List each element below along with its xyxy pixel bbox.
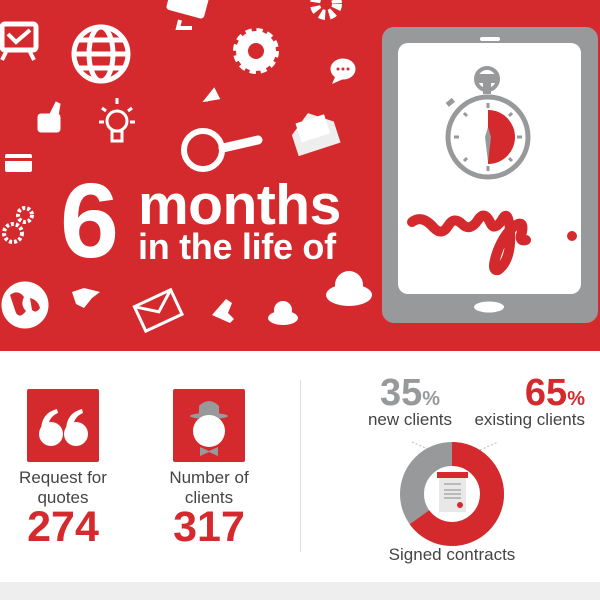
stat: request for quotes: [19, 389, 107, 551]
icon: world: [2, 282, 48, 328]
stat: number of clients: clients: [185, 488, 233, 507]
title: 6 months in the life of: months: [138, 173, 341, 237]
stat: request for quotes: quotes: [37, 488, 89, 507]
title: 6 months in the life of: in the life of: [138, 226, 336, 267]
label: 35% new clients: 35%: [380, 372, 440, 414]
icon: mail: [134, 290, 182, 331]
icon: globe: [74, 27, 128, 81]
icon: quote marks: [27, 389, 99, 462]
label: 35% new clients: [368, 372, 452, 429]
label: 65% existing clients: existing clients: [474, 410, 585, 429]
icons: decorative white icons: [0, 0, 372, 334]
icon: speech bubble: [331, 59, 355, 83]
icon: gears small: [4, 208, 32, 242]
stat: request for quotes: 274: [27, 503, 99, 551]
logo: mys.: [412, 215, 526, 270]
icon: monitor: [166, 0, 209, 28]
chart: signed contracts donut: [368, 372, 585, 564]
icon: stamp: [212, 299, 234, 323]
icon: envelope open: [287, 106, 341, 156]
label: 35% new clients: new clients: [368, 410, 452, 429]
icon: gear: [236, 31, 276, 71]
icon: stopwatch: [446, 68, 528, 177]
icon: arrow: [206, 90, 218, 101]
icon: cloud large: [326, 271, 372, 306]
icon: bulb: [99, 98, 135, 141]
chart: signed contracts donut: Signed contracts: [389, 545, 515, 564]
stat: number of clients: 317: [173, 503, 245, 551]
label: 65% existing clients: 65%: [525, 372, 585, 414]
tablet: [382, 27, 598, 323]
icon: pointing hand: [72, 288, 100, 308]
stat: number of clients: [169, 389, 249, 551]
stat: request for quotes: Request for: [19, 468, 107, 487]
icon: magnifier: [184, 131, 258, 169]
icon: card: [5, 154, 32, 172]
title: 6 months in the life of: [60, 162, 341, 280]
icon: client avatar: [173, 389, 245, 462]
icon: presentation: [2, 24, 36, 60]
label: 65% existing clients: [474, 372, 585, 429]
stat: number of clients: Number of: [169, 468, 249, 487]
icon: cloud small: [268, 301, 298, 325]
panel: red hero: [0, 0, 600, 351]
title: 6 months in the life of: 6: [60, 162, 119, 280]
icon: gear top: [315, 0, 337, 15]
icon: thumbs up: [38, 102, 60, 132]
